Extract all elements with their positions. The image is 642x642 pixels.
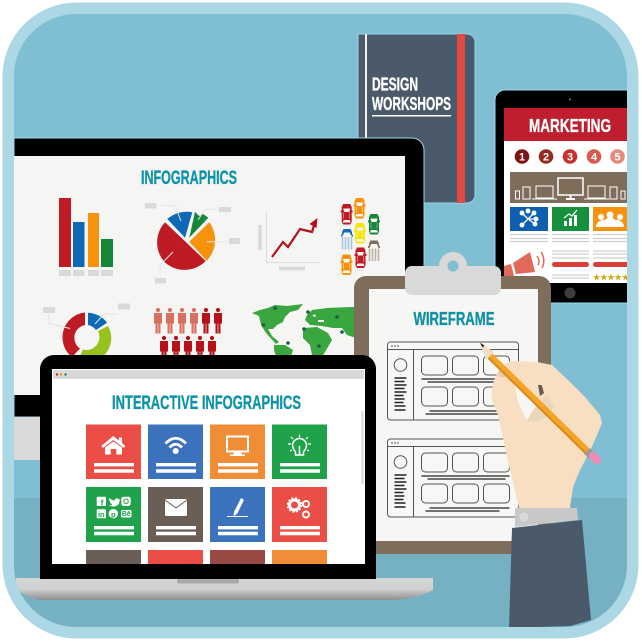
tile: social: in xyxy=(98,510,105,519)
tile: wifi xyxy=(148,424,203,479)
tile: social: f xyxy=(101,498,104,508)
tile: monitor xyxy=(210,424,265,479)
thumb xyxy=(527,395,554,422)
shirt cuff xyxy=(515,508,578,527)
monitor title: INFOGRAPHICS xyxy=(141,168,237,189)
laptop base xyxy=(16,578,433,600)
icon: megaphone xyxy=(504,252,544,276)
tile: home xyxy=(86,424,141,479)
people chart xyxy=(154,308,222,355)
marketing text lines xyxy=(510,234,627,278)
partial tile row xyxy=(86,550,327,564)
numbered steps: 4 xyxy=(591,152,598,164)
device banner xyxy=(510,172,627,203)
notebook title: DESIGN xyxy=(372,75,418,95)
tile: social: p xyxy=(111,510,116,519)
wireframe title: WIREFRAME xyxy=(414,308,494,329)
tile: email xyxy=(148,487,203,542)
numbered steps: 1 xyxy=(519,152,525,164)
star rating: ★★★★★ xyxy=(593,273,630,282)
laptop: interactive infographics xyxy=(16,355,433,600)
jacket sleeve xyxy=(509,520,591,628)
pie chart xyxy=(145,203,240,284)
tile: settings xyxy=(272,487,327,542)
tile: social: Bē xyxy=(122,511,131,518)
clipboard: wireframe xyxy=(354,252,551,554)
line chart xyxy=(260,211,319,268)
notebook: design workshops xyxy=(358,34,475,203)
car icons xyxy=(340,198,380,275)
wireframe sketch 1 xyxy=(388,342,518,420)
floor xyxy=(14,498,627,627)
numbered steps: 2 xyxy=(543,152,549,164)
hand xyxy=(491,361,602,508)
desktop monitor: infographics xyxy=(14,138,424,460)
call to action pills xyxy=(552,262,633,267)
marketing tiles xyxy=(510,207,633,231)
marketing header xyxy=(504,108,627,141)
tile: pencil xyxy=(210,487,265,542)
background wall xyxy=(14,14,627,498)
numbered steps xyxy=(515,149,625,164)
browser bar xyxy=(53,370,364,379)
tile: idea bulb xyxy=(272,424,327,479)
tablet: marketing xyxy=(495,90,642,303)
fingernail xyxy=(498,369,508,377)
numbered steps: 5 xyxy=(614,152,621,164)
wireframe sketch 2 xyxy=(388,439,518,517)
world map xyxy=(252,304,354,355)
laptop title: INTERACTIVE INFOGRAPHICS xyxy=(112,392,301,414)
pencil xyxy=(480,343,597,460)
numbered steps: 3 xyxy=(567,152,573,164)
tile: social xyxy=(86,487,141,542)
gap between fingers xyxy=(515,383,542,420)
marketing header: MARKETING xyxy=(529,115,611,136)
notebook title: WORKSHOPS xyxy=(372,94,451,114)
clipboard clip xyxy=(405,252,501,295)
donut chart xyxy=(43,306,130,363)
hand with pencil xyxy=(480,343,602,628)
bar chart xyxy=(59,198,113,273)
clipboard edge showing through xyxy=(538,385,544,396)
notebook title xyxy=(372,75,451,116)
